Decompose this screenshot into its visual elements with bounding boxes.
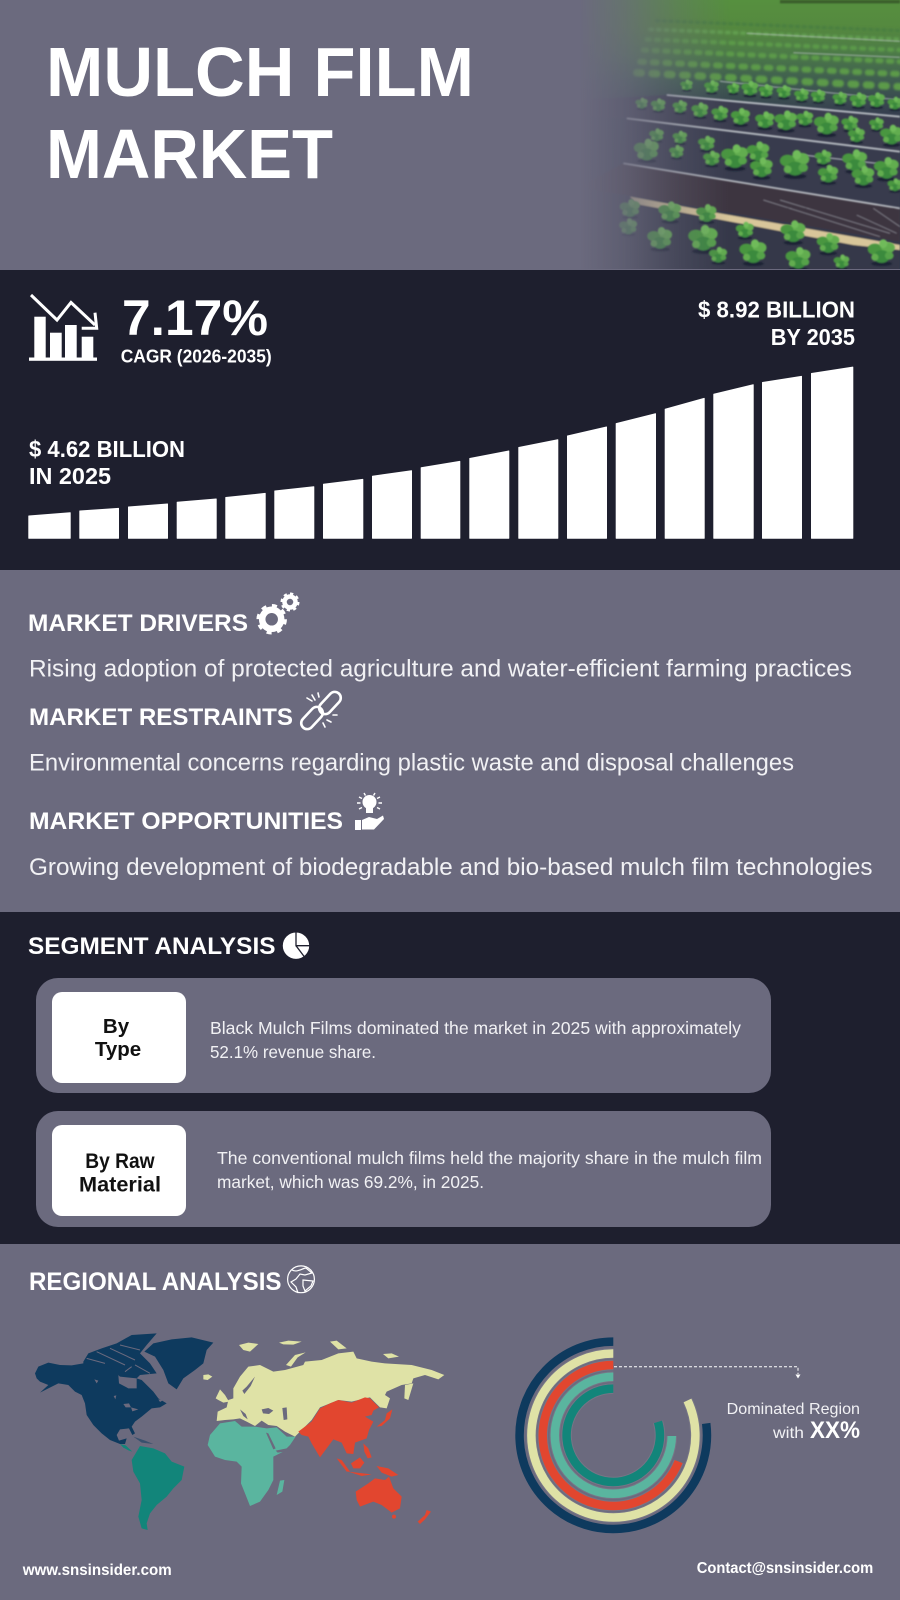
ring: north america xyxy=(520,1342,707,1529)
ring: europe and north asia xyxy=(531,1354,695,1518)
region: south america xyxy=(120,1444,184,1530)
CAGR value: 7.17% xyxy=(122,290,268,346)
text: by raw material: The conventional mulch films held the majority share in the mulch film xyxy=(217,1148,762,1168)
text: driver: Rising adoption of protected agriculture and water-efficient farming practices xyxy=(29,656,852,683)
text: by type: 52.1% revenue share. xyxy=(210,1042,376,1062)
icon: broken chain link xyxy=(299,689,343,732)
callout: dominated region: with xyxy=(772,1425,804,1442)
card: by raw material xyxy=(36,1111,771,1227)
start value label: $ 4.62 BILLION xyxy=(29,436,185,462)
text: by raw material: market, which was 69.2%, in 2025. xyxy=(217,1172,484,1192)
start value label: IN 2025 xyxy=(29,463,111,489)
text: by type: Black Mulch Films dominated the market in 2025 with approximately xyxy=(210,1018,741,1038)
text: restraint: Environmental concerns regarding plastic waste and disposal challenges xyxy=(29,750,794,777)
region: africa and middle east xyxy=(208,1421,296,1506)
start value label xyxy=(29,436,185,489)
title: MARKET xyxy=(46,115,333,193)
radial ring chart xyxy=(520,1342,707,1529)
heading: segment analysis: SEGMENT ANALYSIS xyxy=(28,933,276,960)
label box: by raw material: By Raw xyxy=(85,1150,155,1173)
label box: by type: Type xyxy=(95,1038,141,1061)
panel: regional analysis xyxy=(0,1244,900,1600)
end value label: BY 2035 xyxy=(771,324,855,350)
region: europe and north asia xyxy=(203,1341,444,1437)
world map xyxy=(35,1333,444,1530)
panel: market size xyxy=(0,270,900,570)
label box: by type xyxy=(52,992,186,1083)
panel: market dynamics xyxy=(0,570,900,912)
icon: pie chart xyxy=(283,932,310,959)
label box: by raw material: Material xyxy=(79,1174,161,1197)
region: north america xyxy=(35,1333,213,1444)
end value label xyxy=(698,297,855,350)
text: by raw material xyxy=(217,1148,762,1192)
end value label: $ 8.92 BILLION xyxy=(698,297,855,323)
photo: mulch film field xyxy=(580,0,900,272)
region: asia pacific xyxy=(298,1397,431,1524)
arrow: dashed leader xyxy=(614,1367,800,1378)
icon: globe xyxy=(288,1266,314,1293)
bar chart: market growth xyxy=(29,367,853,538)
card: by type xyxy=(36,978,771,1093)
ring: africa and middle east xyxy=(555,1377,672,1494)
CAGR label: CAGR (2026-2035) xyxy=(121,347,272,367)
title: MULCH FILM xyxy=(46,33,474,111)
callout: dominated region: Dominated Region xyxy=(727,1401,860,1418)
footer: contact: Contact@snsinsider.com xyxy=(697,1560,873,1577)
heading: market restraints: MARKET RESTRAINTS xyxy=(29,704,293,731)
text: by type xyxy=(210,1018,741,1062)
ring: south america xyxy=(567,1389,660,1482)
heading: market drivers: MARKET DRIVERS xyxy=(28,610,248,637)
label box: by raw material xyxy=(52,1125,186,1216)
text: opportunity: Growing development of biodegradable and bio-based mulch film technologies xyxy=(29,854,872,881)
ring: asia pacific xyxy=(543,1365,679,1506)
callout: dominated region xyxy=(727,1401,860,1444)
heading: regional analysis: REGIONAL ANALYSIS xyxy=(29,1268,282,1296)
title xyxy=(46,33,474,193)
icon: gears xyxy=(258,594,298,633)
icon: hand holding light bulb xyxy=(355,793,384,830)
panel: segment analysis xyxy=(0,912,900,1244)
callout: dominated region: XX% xyxy=(810,1417,860,1444)
heading: market opportunities: MARKET OPPORTUNITIES xyxy=(29,808,343,835)
icon: chart with declining arrow xyxy=(29,295,97,361)
label box: by type: By xyxy=(103,1015,130,1038)
footer: website: www.snsinsider.com xyxy=(22,1562,172,1579)
panel: header xyxy=(0,0,900,272)
